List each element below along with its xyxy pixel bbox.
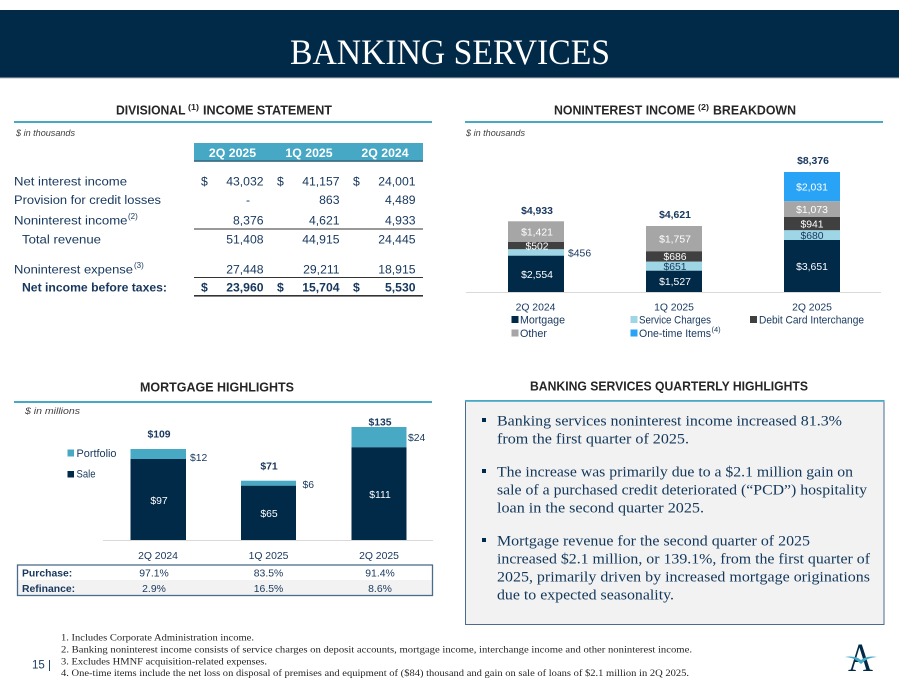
bar: 2Q 2024: $456: [568, 248, 591, 260]
chart axis: [103, 540, 433, 562]
bar: 1Q 2025: $1,527: [659, 277, 691, 288]
chart axis: [466, 292, 881, 314]
heading: divisional income statement: DIVISIONAL: [116, 102, 186, 118]
panel: noninterest income breakdown: [465, 102, 883, 340]
bar: 2Q 2025: $1,073: [796, 205, 828, 216]
bar: 2Q 2025: [352, 418, 426, 540]
bullet 1: from the first quarter of 2025.: [497, 432, 689, 448]
row: noninterest expense: (3): [134, 261, 144, 270]
purchase and refinance table: 83.5%: [254, 568, 283, 580]
bar: 2Q 2024: $2,554: [521, 270, 553, 281]
bar: 2Q 2024: [130, 430, 208, 540]
row: noninterest expense: 27,448: [226, 262, 264, 276]
chart axis: 1Q 2025: [249, 551, 289, 562]
bar: 2Q 2025: $111: [369, 490, 391, 501]
row: net income before taxes: 23,960: [226, 280, 264, 294]
bar: 2Q 2024: [508, 206, 591, 292]
purchase and refinance table: Refinance:: [22, 584, 75, 595]
row: noninterest income: [14, 212, 423, 230]
row: provision: Provision for credit losses: [14, 193, 161, 207]
bullet 1: Banking services noninterest income increased 81.3%: [497, 414, 842, 430]
bullet 1: [482, 414, 842, 448]
legend: Service Charges: [639, 314, 712, 326]
row: net income before taxes: [22, 280, 423, 297]
row: net income before taxes: 5,530: [385, 280, 416, 294]
bar: 2Q 2025: $3,651: [796, 262, 828, 273]
row: net interest income: Net interest income: [14, 174, 127, 188]
bar: 1Q 2025: $6: [302, 480, 314, 491]
row: noninterest expense: 29,211: [303, 262, 340, 276]
bar: 2Q 2025: [784, 156, 840, 292]
row: total revenue: Total revenue: [22, 232, 101, 246]
bar: 2Q 2025: $2,031: [796, 182, 828, 194]
bar: 1Q 2025: $686: [663, 252, 687, 263]
bullet 2: [482, 464, 868, 516]
purchase and refinance table: 8.6%: [368, 584, 392, 595]
row: provision: -: [246, 193, 250, 207]
icon: company logo: A: [848, 635, 873, 680]
legend: [512, 314, 864, 340]
row: noninterest expense: 18,915: [378, 262, 416, 276]
table header: 2Q 2024: [361, 146, 409, 160]
row: noninterest income: 8,376: [233, 214, 264, 228]
bar: 2Q 2025: $680: [800, 231, 824, 242]
bullet 3: Mortgage revenue for the second quarter of 2025: [497, 534, 810, 550]
page number: 15 |: [32, 658, 51, 672]
footnotes: 4. One-time items include the net loss on disposal of premises and equipment of ($84) thousand and gain on sale of loans of $2.1 million in 2Q 2025.: [61, 668, 689, 679]
row: net interest income: 41,157: [302, 174, 340, 188]
row: net interest income: 43,032: [226, 174, 264, 188]
legend: [68, 448, 116, 480]
bar: 1Q 2025: $651: [663, 262, 687, 273]
bar: 2Q 2025: $24: [408, 433, 426, 444]
title: BANKING SERVICES: [290, 32, 610, 72]
purchase and refinance table: 16.5%: [254, 584, 283, 595]
row: total revenue: 51,408: [226, 232, 264, 246]
heading: quarterly highlights: BANKING SERVICES QUARTERLY HIGHLIGHTS: [530, 378, 808, 394]
bar: 1Q 2025: [646, 210, 702, 292]
unit note: $ in thousands: [465, 128, 526, 138]
bar: 1Q 2025: $71: [260, 462, 278, 472]
row: noninterest income: 4,933: [385, 214, 416, 228]
row: net income before taxes: $: [277, 280, 284, 294]
table header: 1Q 2025: [285, 146, 333, 160]
bar: 2Q 2024: $12: [190, 453, 208, 464]
footnotes: 3. Excludes HMNF acquisition-related expenses.: [61, 658, 267, 668]
footnotes: 2. Banking noninterest income consists of service charges on deposit accounts, mortgage income, interchange income and other noninterest income.: [61, 644, 692, 656]
bullet 3: due to expected seasonality.: [497, 588, 674, 604]
bar: 2Q 2025: $135: [368, 418, 392, 428]
purchase and refinance table: [18, 565, 432, 596]
bullet 3: increased $2.1 million, or 139.1%, from the first quarter of: [497, 552, 870, 568]
panel: divisional income statement: [14, 102, 432, 297]
heading: divisional income statement: [14, 102, 432, 123]
row: net income before taxes: 15,704: [302, 280, 340, 294]
bullet 3: 2025, primarily driven by increased mortgage originations: [497, 570, 870, 586]
heading: divisional income statement: (1): [188, 103, 199, 112]
row: net interest income: 24,001: [378, 174, 416, 188]
bullet 2: The increase was primarily due to a $2.1 million gain on: [497, 464, 854, 480]
bar: 2Q 2025: $941: [800, 220, 824, 230]
bar: 2Q 2024: $97: [150, 496, 168, 507]
row: noninterest expense: [14, 261, 423, 278]
row: provision: 863: [319, 193, 340, 207]
highlights box: [465, 400, 884, 624]
row: noninterest income: Noninterest income: [14, 214, 128, 228]
legend: Portfolio: [76, 448, 116, 460]
unit note: $ in thousands: [15, 128, 76, 138]
heading: noninterest income breakdown: [465, 102, 883, 123]
row: net interest income: $: [201, 174, 208, 188]
legend: Other: [520, 328, 547, 340]
purchase and refinance table: Purchase:: [22, 568, 72, 580]
heading: noninterest income breakdown: NONINTEREST INCOME: [554, 102, 695, 118]
bullet 2: sale of a purchased credit deteriorated (“PCD”) hospitality: [497, 482, 868, 498]
purchase and refinance table: 97.1%: [139, 568, 169, 580]
bar: 2Q 2024: $109: [147, 430, 171, 440]
bar: 2Q 2024: $502: [525, 242, 549, 252]
row: net interest income: $: [277, 174, 284, 188]
chart axis: 2Q 2024: [138, 551, 178, 562]
purchase and refinance table: 2.9%: [142, 584, 166, 595]
chart axis: 2Q 2024: [516, 302, 556, 314]
panel: banking services quarterly highlights: [465, 378, 884, 624]
heading: divisional income statement: INCOME STATEMENT: [203, 102, 332, 118]
row: provision: [14, 193, 416, 207]
row: noninterest income: 4,621: [309, 214, 340, 228]
bar: 1Q 2025: $65: [260, 509, 278, 520]
panel: mortgage highlights: [14, 380, 433, 596]
legend: (4): [712, 325, 721, 334]
chart axis: 1Q 2025: [654, 302, 694, 314]
bar: 2Q 2025: $8,376: [797, 156, 829, 167]
bullet 3: [482, 534, 870, 604]
chart axis: 2Q 2025: [792, 302, 832, 314]
row: net interest income: $: [353, 174, 360, 188]
row: net interest income: [14, 174, 416, 188]
bullet 2: loan in the second quarter 2025.: [497, 500, 704, 516]
legend: One-time Items: [639, 328, 712, 340]
row: net income before taxes: $: [201, 280, 208, 294]
heading: noninterest income breakdown: (2): [698, 103, 709, 112]
row: total revenue: [22, 232, 416, 246]
heading: noninterest income breakdown: BREAKDOWN: [713, 102, 796, 118]
footnotes: [61, 634, 692, 679]
legend: Sale: [76, 468, 96, 480]
row: noninterest expense: Noninterest expense: [14, 262, 133, 276]
bar: 1Q 2025: [241, 462, 314, 540]
unit note: $ in millions: [24, 406, 81, 416]
title banner: [0, 10, 899, 78]
bar: 1Q 2025: $4,621: [659, 210, 691, 221]
row: total revenue: 44,915: [302, 232, 340, 246]
footnotes: 1. Includes Corporate Administration income.: [61, 634, 254, 644]
bar: 2Q 2024: $1,421: [521, 228, 553, 238]
legend: Mortgage: [520, 314, 565, 326]
row: total revenue: 24,445: [378, 232, 416, 246]
row: provision: 4,489: [385, 193, 416, 207]
legend: Debit Card Interchange: [759, 314, 864, 326]
row: net income before taxes: Net income before taxes:: [22, 280, 167, 294]
table header: [194, 143, 423, 162]
table header: 2Q 2025: [209, 146, 256, 160]
bar: 1Q 2025: $1,757: [659, 234, 691, 246]
chart axis: 2Q 2025: [359, 551, 399, 562]
bar: 2Q 2024: $4,933: [521, 206, 553, 217]
row: noninterest income: (2): [128, 212, 138, 221]
purchase and refinance table: 91.4%: [365, 568, 395, 580]
row: net income before taxes: $: [353, 280, 360, 294]
heading: mortgage highlights: MORTGAGE HIGHLIGHTS: [140, 380, 294, 394]
